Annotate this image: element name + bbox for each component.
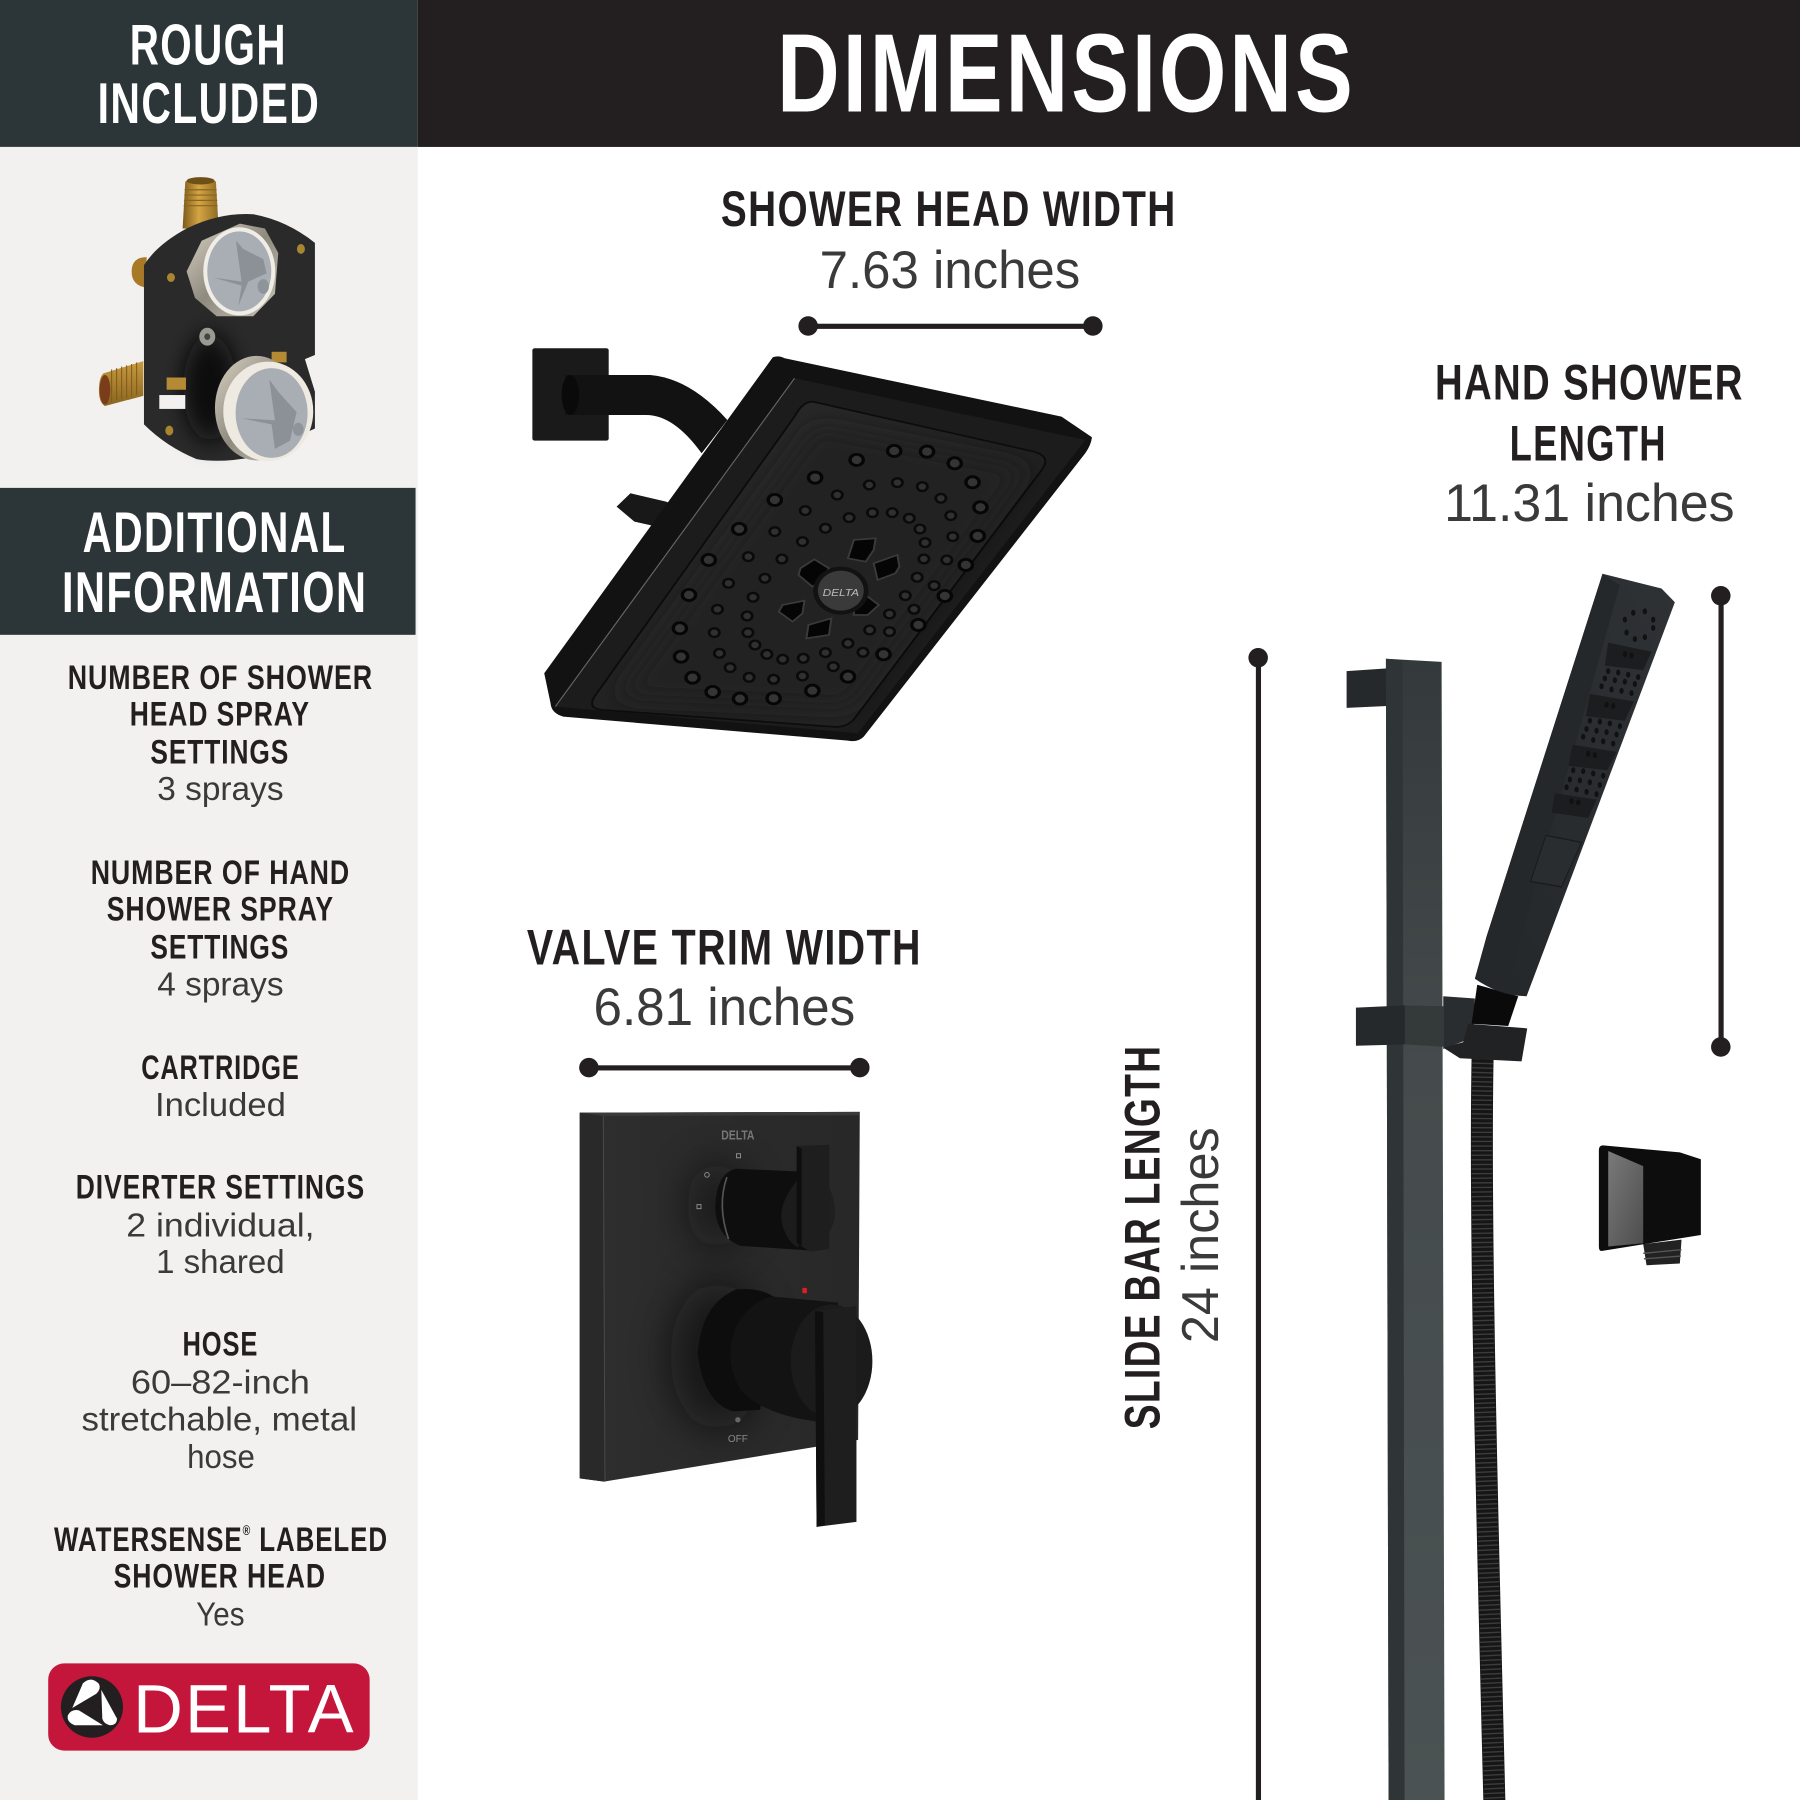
info: diverter settings: 1 shared [156, 1244, 285, 1281]
info: watersense: SHOWER HEAD [114, 1558, 326, 1596]
label: hand shower length [1435, 353, 1744, 533]
heading: additional information [62, 501, 367, 625]
label: slide bar length [1113, 1045, 1229, 1429]
label: valve trim width [527, 918, 922, 1037]
info: hose: hose [187, 1439, 255, 1476]
info: watersense: ® [243, 1523, 251, 1538]
temperature lever [815, 1306, 856, 1527]
product: valve trim [580, 1112, 872, 1527]
label: slide bar length: SLIDE BAR LENGTH [1113, 1045, 1170, 1429]
center jets [779, 538, 899, 638]
label: shower head width: SHOWER HEAD WIDTH [721, 180, 1177, 237]
title: DIMENSIONS [777, 10, 1356, 135]
red hot indicator [802, 1288, 807, 1293]
label: hand shower length: 11.31 inches [1444, 474, 1735, 533]
label: valve trim width: VALVE TRIM WIDTH [527, 918, 922, 975]
info: diverter settings: DIVERTER SETTINGS [76, 1168, 365, 1206]
label: hand shower length: LENGTH [1510, 414, 1667, 471]
info: hose: 60–82-inch [131, 1365, 310, 1402]
spray nozzles [680, 451, 980, 699]
info: hose: HOSE [183, 1326, 258, 1364]
logo wordmark: DELTA [133, 1670, 354, 1747]
product: slide bar and hand shower [1347, 574, 1675, 1800]
info: hand shower spray settings: SETTINGS [150, 929, 289, 967]
info: hand shower spray settings [91, 854, 350, 1003]
wall flange [532, 348, 609, 441]
product: wall elbow [1599, 1145, 1701, 1265]
header: dimensions [418, 0, 1800, 147]
center badge [813, 567, 869, 615]
off label: OFF [728, 1434, 748, 1445]
info: watersense: LABELED [251, 1521, 388, 1559]
slide bar [1347, 659, 1445, 1800]
info: cartridge [141, 1049, 300, 1124]
label: shower head width: 7.63 inches [820, 241, 1080, 300]
info: shower head spray settings: HEAD SPRAY [130, 696, 310, 734]
heading: rough included: INCLUDED [98, 72, 320, 136]
info: hand shower spray settings: 4 sprays [157, 966, 284, 1003]
dimension line: slide bar length [1248, 648, 1268, 1800]
shower arm [565, 375, 727, 453]
logo: delta [48, 1663, 370, 1751]
info: hand shower spray settings: SHOWER SPRAY [107, 891, 334, 929]
info: shower head spray settings: NUMBER OF SHOWER [68, 659, 373, 697]
info: hose [82, 1326, 357, 1476]
head body [544, 356, 1092, 741]
dimension line: hand shower length [1711, 586, 1731, 1057]
icon: rough-in valve [99, 177, 315, 461]
info: watersense: Yes [196, 1597, 245, 1634]
shower nozzle bands [1552, 643, 1652, 818]
slider mount [1356, 996, 1527, 1061]
label: slide bar length: 24 inches [1171, 1127, 1229, 1343]
heading: rough included: ROUGH [130, 13, 287, 77]
dimension line: valve trim width [579, 1058, 870, 1077]
heading: additional information: ADDITIONAL [83, 501, 347, 565]
header: rough included [0, 0, 418, 147]
label: valve trim width: 6.81 inches [593, 978, 855, 1037]
info: hand shower spray settings: NUMBER OF HAND [91, 854, 350, 892]
hand shower body [1475, 574, 1675, 996]
diverter knob [715, 1169, 813, 1251]
info: shower head spray settings: 3 sprays [157, 771, 284, 808]
hand shower panel [1531, 835, 1582, 887]
info: cartridge: CARTRIDGE [141, 1049, 300, 1087]
trim plate [580, 1112, 860, 1482]
info: diverter settings [76, 1168, 365, 1281]
info: watersense: WATERSENSE [54, 1521, 304, 1559]
label: shower head width [721, 180, 1177, 300]
dimension line: shower head width [798, 316, 1103, 336]
hand shower jets [1567, 611, 1653, 802]
info: diverter settings: 2 individual, [126, 1207, 315, 1244]
shower neck [1472, 985, 1518, 1026]
heading: additional information: INFORMATION [62, 561, 367, 625]
panel: left sidebar background [0, 147, 418, 1800]
product: shower head [532, 348, 1092, 741]
icon: delta triangle mark [61, 1676, 123, 1738]
info: shower head spray settings [68, 659, 373, 808]
info: watersense [54, 1521, 388, 1634]
hose [1482, 1058, 1495, 1800]
setting marks [697, 1154, 741, 1209]
info: cartridge: Included [155, 1087, 286, 1124]
product: shower head: DELTA [823, 588, 859, 599]
info: shower head spray settings: SETTINGS [150, 733, 289, 771]
spray lever [617, 493, 678, 528]
info: hose: stretchable, metal [82, 1401, 357, 1438]
brand mark: DELTA [721, 1129, 754, 1143]
temperature knob [698, 1289, 773, 1411]
heading: rough included [98, 13, 320, 136]
header: additional information [0, 488, 416, 635]
